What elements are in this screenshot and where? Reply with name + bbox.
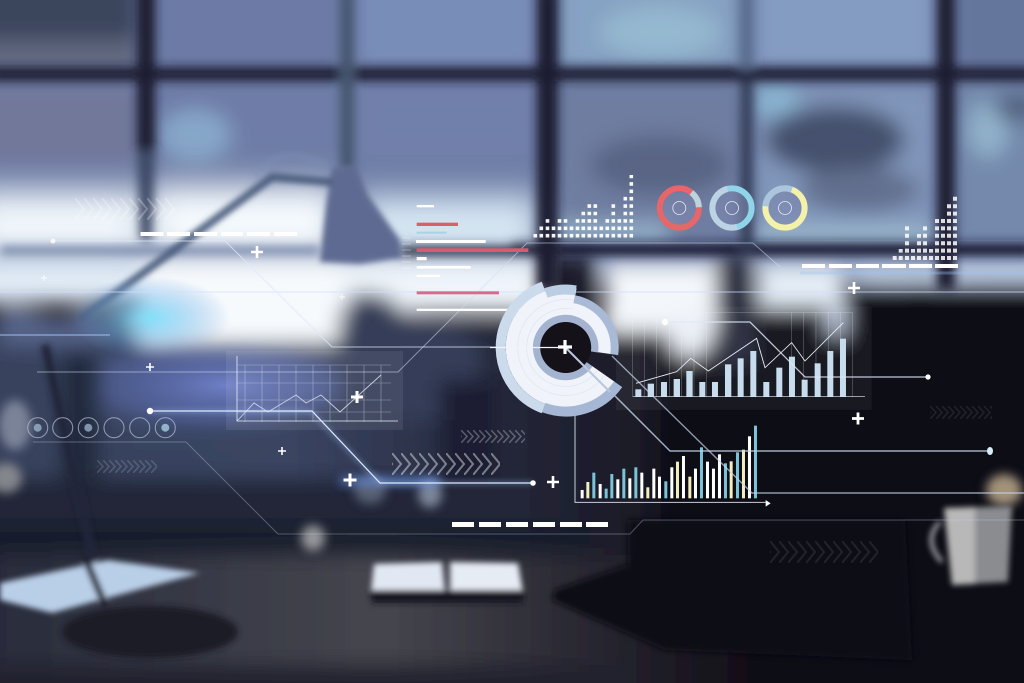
panel: multicolour bar chart lower (572, 411, 771, 507)
panel: small line chart left (226, 351, 403, 430)
white dashed labels (140, 232, 958, 527)
dotted bar chart centre (535, 175, 631, 238)
connector lines from hub to the right (568, 319, 1024, 493)
tick ladder beside bar list (402, 238, 411, 268)
donut: yellow (764, 187, 806, 229)
dimming of upper sky (0, 0, 1024, 240)
faint long connector lines (0, 238, 1024, 534)
radial hub gauge (477, 258, 655, 437)
donut: red (652, 180, 707, 236)
row of six small circles (28, 418, 175, 438)
donut: blue (708, 184, 756, 232)
glowing connector line to dot (147, 408, 536, 486)
dotted bar chart right (895, 196, 955, 260)
plus markers (41, 246, 864, 488)
list of horizontal bars (416, 205, 570, 311)
soft bright sky near horizon (0, 185, 540, 260)
three donut gauges (652, 180, 806, 236)
chevron arrows (75, 198, 992, 563)
panel: bar and line chart upper right (616, 307, 872, 410)
